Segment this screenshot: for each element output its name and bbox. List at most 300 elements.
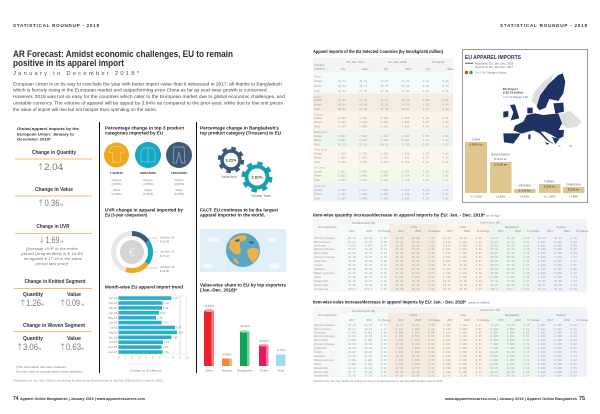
bar chart: Jul-18: [110, 326, 117, 330]
icon: trousers: [166, 142, 192, 168]
table headers: % Change: [477, 318, 490, 322]
donut labels: Jan-Dec '18: [160, 236, 175, 240]
bar chart: 8: [173, 356, 175, 360]
table rows: Woven total: [314, 370, 328, 374]
table rows: Total: [314, 196, 320, 200]
table rows: Overall total: [314, 287, 328, 291]
title: AR Forecast: Amidst economic challenges, EU to remain: [13, 48, 233, 59]
stat: change in UVR: ↓: [38, 236, 46, 246]
note: UVR explanation: as against € 17.18 in the same: [24, 257, 82, 261]
divider: middle column: [196, 122, 197, 373]
map bars: +/- 1.90%: [544, 194, 556, 198]
table rows: Babies' garments: [314, 271, 335, 275]
table rows: Women's blouses: [314, 247, 335, 251]
intro paragraph: the value of import will rise but not hamper Euro spending on the same.: [13, 107, 157, 112]
map bars: +4.25%: [520, 194, 530, 198]
map bars: [465, 138, 584, 198]
table rows: 6.223 6.410 3.00 5.500 5.220 5.09 2.114 2.020 4.45 4.620 4.300 6.93 1.101 1.420 8.97: [348, 332, 577, 334]
map callout: EU import total: EU Import: [503, 87, 518, 91]
table headers: Value: [405, 67, 412, 71]
table headers: 2018: [515, 229, 521, 233]
table headers: % Change: [428, 318, 441, 322]
note: UVR explanation: period (unspecified) is € 16.89: [21, 252, 83, 256]
bar: China: [204, 304, 214, 372]
table headers: China: [410, 313, 418, 317]
table rows: 1.822 1.940 1.895 2.014 4.01 3.81: [338, 174, 449, 178]
panel: month-wise trend: [105, 284, 189, 372]
table headers: 2017: [447, 318, 453, 322]
bar: Turkey: [259, 339, 269, 372]
bar: India: [276, 348, 286, 372]
table headers: Item description: [318, 313, 337, 317]
table rows: Knitted: [314, 134, 323, 138]
table bands: [313, 307, 587, 377]
map bars: $ 13.51 bn: [494, 157, 507, 161]
bar: Turkey: Turkey: [260, 368, 269, 372]
table rows: Women's trousers: [314, 323, 335, 327]
bar: Bangladesh: 18.14%: [240, 324, 250, 328]
icon: volume gear: [244, 164, 270, 190]
stat: change in UVR: [15, 224, 92, 246]
map bars: CAMBODIA: [566, 182, 581, 186]
bar chart: 10: [186, 356, 189, 360]
table rows: World: [314, 74, 321, 78]
bar chart: 0: [118, 356, 120, 360]
chart unit note: (Value in $ billion): [130, 368, 161, 372]
bar: Turkey: 11.52%: [259, 339, 269, 343]
donut chart: €: [129, 246, 136, 260]
table headers: % Change: [527, 318, 540, 322]
note: UVR explanation: [Average UVR of the entire: [26, 247, 78, 251]
category figures: Value: [175, 188, 183, 192]
table rows: Knitted: [314, 98, 323, 102]
category figures: (1.65%): [143, 192, 153, 196]
table headers: % Change: [576, 318, 589, 322]
table rows: Sri Lanka: [314, 166, 326, 170]
table headers: Jan.-Dec. 2018: [388, 60, 407, 64]
table headers: China: [410, 225, 418, 229]
map bars: +/- 2.56%: [470, 194, 482, 198]
stat: woven segment: [14, 323, 92, 353]
table: quantity increase and decrease: [313, 212, 589, 292]
table rows: Sweaters: [314, 267, 326, 271]
panel: top 3 product categories: [104, 126, 192, 196]
stat: knitted segment: Value: [67, 292, 81, 298]
footer: left page: Apparel Online Bangladesh | January 2019 | www.apparelresources.com: [20, 397, 146, 401]
table headers: Vietnam: [556, 313, 567, 317]
bar chart: 6.49: [164, 301, 169, 305]
table rows: Woven: [314, 156, 323, 160]
footer: left page: 74: [13, 396, 19, 402]
map bars: +4.98%: [569, 194, 579, 198]
table headers: [318, 308, 589, 322]
subtitle: January to December 2018*: [13, 71, 140, 77]
table rows: Women's dresses: [314, 255, 335, 259]
table rows: Total: [314, 142, 320, 146]
stat: woven segment: Value: [67, 336, 81, 342]
table rows: 82.10 83.14 1.26 40.12 40.70 1.45 21.05 21.90 4.04 72.40 73.90 2.07 31.02 31.90 2.84: [348, 280, 577, 283]
table rows: 16.04 14.40 15.62 14.33 2.62 0.49: [338, 104, 449, 106]
stat: change in quantity: ↑: [37, 163, 45, 173]
bar chart: Apr-18: [109, 311, 117, 315]
stat: change in value: %: [60, 203, 63, 207]
table rows: 3.021 3.142 3.180 3.301 5.26 5.06: [338, 121, 449, 124]
gear captions: Value item: [221, 175, 237, 179]
table rows: Woven: [314, 192, 323, 196]
bar chart: 9: [179, 356, 181, 360]
intro paragraph: European Union is on its way to conclude the year with better import value than it witnessed in 2017, all thanks to Bangladesh: [13, 82, 283, 86]
table rows: Overcoats: [314, 330, 327, 334]
header: right page: STATISTICAL ROUNDUP - 2018: [500, 23, 587, 28]
table rows: Socks: [314, 362, 322, 366]
bar: Bangladesh: Bangladesh: [237, 368, 253, 372]
table rows: Overall total: [314, 374, 328, 378]
table rows: 42.55 44.20 3.88 28.10 28.55 1.60 9.022 9.350 3.64 45.33 46.40 2.36 6.440 6.210 3.57: [348, 260, 577, 263]
map bars: $ 4.25 bn: [519, 188, 531, 192]
gear captions: [221, 175, 271, 198]
map bars: $ 3.56 bn: [568, 188, 580, 192]
table headers: India: [460, 225, 466, 229]
panel: UVR change donut: [105, 208, 183, 273]
table headers: 2017: [547, 318, 553, 322]
footer: right page: 75: [579, 396, 585, 402]
table rows: 18.50 19.01 2.76 10.10 10.80 6.93 4.201 4.010 4.55 7.200 7.900 9.72 1.100 1.230 3.82: [348, 343, 577, 346]
heading: top product category (Trousers) to EU: [200, 130, 281, 136]
table headers: 2018: [366, 318, 372, 322]
table headers: 2018: [415, 318, 421, 322]
table headers: Qty: [426, 67, 431, 71]
table headers: Item description: [318, 225, 337, 229]
stat: change in UVR: %: [60, 240, 63, 244]
table headers: 2017: [498, 229, 504, 233]
map callout: EU import total: Y-o-Y % Change: 0.36: [503, 96, 528, 99]
table headers: Bangladesh: [505, 313, 520, 317]
map legend: Imports by EU, Jan.-Dec. 2018: [475, 62, 514, 66]
table rows: 15.62 15.04 3.71 22.10 21.55 2.49 6.001 6.210 3.48 18.40 19.20 4.35 5.220 5.500 5.36: [348, 248, 577, 251]
table rows: Knitted: [314, 116, 323, 120]
table bands: [313, 58, 453, 202]
table: value increase and decrease: (value in million): [468, 300, 490, 304]
table rows: Total: [314, 89, 320, 93]
category figures: Volume: [112, 178, 122, 182]
table headers: 2018: [464, 318, 470, 322]
bar chart: Mar-18: [108, 306, 118, 310]
table rows: 12.62 12.04 4.60 9.100 8.550 6.04 3.001 3.210 6.96 8.400 9.200 9.52 1.220 1.500 8.20: [348, 335, 577, 338]
icon: t-shirts: [104, 142, 129, 168]
table rows: 21.40 21.91 2.38 10.40 10.10 2.88 3.040 3.120 2.63 9.500 9.200 3.16 2.140 2.310 7.94: [348, 355, 577, 358]
bar chart: 3: [138, 356, 140, 360]
table headers: 2017: [547, 229, 553, 233]
table rows: Men's shirts: [314, 338, 328, 342]
note: conversion: from the various product-wise import analysis ]: [16, 370, 83, 374]
table headers: 2017: [349, 229, 355, 233]
heading: (Jan.-Dec. 2018)*: [200, 288, 237, 294]
bar chart: Dec-18: [108, 350, 117, 354]
map callout: EU import total: $ 82.70 billion: [503, 90, 523, 94]
bar chart: 5.49: [157, 316, 163, 320]
stat: change in UVR: 1.69: [46, 235, 60, 245]
table headers: 2018: [564, 318, 570, 322]
intro paragraph: However, 2018 was not so easy for the countries which cater to the European market due to global economic challenges, and: [13, 94, 286, 99]
note: conversion: [16, 365, 83, 374]
table headers: Value: [447, 67, 454, 71]
heading: [200, 126, 281, 136]
table rows: 2.511 2.614 2.603 2.705 3.66 3.48: [338, 170, 449, 174]
table rows: 35.77 36.00 0.63 11.21 11.90 6.15 4.620 5.000 8.23 10.21 10.30 0.88 1.130 1.900 8.14: [348, 371, 577, 374]
table rows: Sweaters: [314, 354, 326, 358]
bar chart: Aug-18: [108, 330, 117, 334]
table rows: 10.13 13.41 10.52 13.90 3.85 3.65: [338, 144, 449, 146]
map legend: [465, 62, 514, 74]
stat: knitted segment: ↑: [59, 299, 67, 309]
stat: knitted segment: ↑: [19, 299, 27, 309]
bar chart: 8.54: [178, 330, 184, 334]
table rows: 11.40 11.71 2.72 9.100 9.020 0.88 2.430 2.560 5.35 5.140 5.220 1.56 1.120 1.200 7.14: [348, 276, 577, 279]
header: left page: STATISTICAL ROUNDUP - 2018: [13, 23, 99, 28]
table rows: Hong Kong: [314, 148, 328, 152]
table title: Item-wise value increase/decrease in apparel imports by EU: Jan. - Dec. 2018*: [313, 300, 466, 304]
panel: fact with globe: [200, 208, 286, 272]
bar chart: [108, 296, 189, 360]
table rows: Women's dresses: [314, 342, 335, 346]
table rows: 20.16 20.91 3.72 10.44 10.91 4.50 4.520 4.720 4.42 13.21 14.02 6.13 2.200 2.310 5.00: [348, 324, 577, 327]
bar chart: Nov-18: [108, 345, 117, 349]
map callout: EU import total: [503, 87, 528, 99]
stat: knitted segment: 1.26: [26, 298, 41, 308]
panel intro text: European Union: January to: [17, 132, 75, 136]
stat: change in value: Change in Value: [35, 187, 73, 193]
stat: knitted segment: Quantity: [23, 292, 43, 298]
stat: knitted segment: %: [81, 303, 84, 307]
bar chart: 6.33: [162, 321, 168, 325]
table rows: Knitted total: [314, 366, 328, 370]
table rows: 4.224 5.611 4.402 5.905 4.21 5.24: [338, 139, 449, 142]
table rows: 2.215 2.702 2.310 2.815 4.29 4.18: [338, 152, 449, 156]
table rows: Knitted total: [314, 279, 328, 283]
table headers: Overall imports (M): [352, 221, 375, 225]
bar chart: 6.39: [163, 306, 169, 310]
stat: change in value: 0.36: [44, 198, 60, 208]
heading: UVR change in apparel imported by: [105, 208, 183, 214]
stat: woven segment: %: [81, 347, 84, 351]
table rows: 5.128 4.451 5.330 4.615 3.94 3.68: [338, 117, 449, 120]
table headers: Imports from (M): [480, 308, 500, 312]
icon: value gear: 3.21%: [225, 158, 237, 162]
table headers: 2017: [398, 229, 404, 233]
table rows: 40.18 41.02 1.26 13.12 13.70 4.42 8.050 8.900 0.56 23.40 23.90 2.14 5.020 5.900 7.53: [348, 367, 577, 370]
bar: Vietnam: 4.89%: [223, 352, 232, 356]
table title: Item-wise quantity increase/decrease in apparel imports by EU: Jan. - Dec. 2018*: [313, 212, 485, 218]
table rows: 10.22 10.45 2.25 15.11 15.30 1.26 6.120 6.010 1.80 12.03 12.50 3.91 9.014 9.220 2.29: [348, 241, 577, 244]
note: UVR explanation: period last year]*: [36, 262, 70, 266]
table rows: T-shirts: [314, 263, 323, 267]
table rows: 12.55 12.20 2.79 7.100 7.550 6.34 2.022 2.350 6.22 7.330 7.400 0.95 1.440 1.210 5.97: [348, 347, 577, 350]
table rows: 81.23 75.95 82.80 77.02 2.04 0.36: [338, 90, 449, 93]
category figures: Value: [113, 188, 120, 192]
table rows: [314, 236, 577, 291]
category figures: (3.07%): [174, 182, 184, 186]
heading: apparel importer in the world.: [200, 212, 265, 218]
heading: Percentage change in Bangladesh's: [200, 126, 279, 132]
stat: change in value: ↑: [37, 199, 45, 209]
donut labels: € 16.89: [160, 240, 169, 244]
table headers: [318, 220, 589, 233]
table rows: [314, 74, 449, 200]
table headers: 2017: [349, 318, 355, 322]
donut labels: € 16.80: [160, 269, 169, 273]
heading: FACT: EU continues to be the largest: [200, 208, 278, 214]
stat: woven segment: Change in Woven Segment: [23, 323, 85, 329]
panel: top exporters bar chart: [200, 282, 286, 372]
category figures: Volume: [143, 178, 153, 182]
map bars: TURKEY: [544, 180, 555, 184]
category figures: (4.75%): [111, 192, 122, 196]
table headers: 2018: [464, 229, 470, 233]
bar chart: 6.33: [162, 345, 168, 349]
heading: Month-wise EU apparel import trend: [105, 284, 183, 290]
intro paragraph: unstable currency. The volume of apparel will be upped by 3.84% as compared to the prior-year, while due to low unit prices: [13, 100, 283, 106]
table headers: 2017: [398, 318, 404, 322]
table rows: 4.119 4.525 4.170 4.716 1.24 4.22: [338, 161, 449, 164]
table headers: Bangladesh: [505, 225, 520, 229]
bar chart: Jan-18: [109, 296, 118, 300]
heading: Value-wise share to EU by top exporters: [200, 282, 286, 288]
table rows: 4.223 4.410 4.43 18.50 18.22 1.51 5.114 5.020 1.84 14.62 14.30 2.19 8.101 8.420 3.94: [348, 244, 577, 248]
table rows: 5.912 7.801 6.122 8.004 3.55 2.60: [338, 135, 449, 138]
bar chart: 5.91: [160, 311, 166, 315]
bar: Vietnam: Vietnam: [222, 368, 233, 372]
table headers: Vietnam: [556, 225, 567, 229]
bar chart: May-18: [108, 316, 117, 320]
table rows: 158.0 161.3 2.04 85.33 86.60 1.49 35.67 36.90 3.45 120.6 124.2 2.98 51.15 52.80 3.23: [348, 288, 577, 291]
icon: value gear: ↑: [230, 152, 232, 158]
map bars: $ 28.03 bn: [470, 142, 483, 146]
footnote: right page: *Selections are Jan.-Sep. 2018 in all holdings for data as per Eurostat data for Jan-Sep 2018 and Euro rates for 2018.: [313, 379, 443, 383]
heading: categories imported by EU: [105, 130, 164, 136]
table: value increase and decrease: [313, 300, 589, 378]
table rows: 8.149 7.593 8.510 7.916 4.43 4.25: [338, 126, 449, 128]
table headers: % Change: [576, 229, 589, 233]
table rows: T-shirts: [314, 350, 323, 354]
table headers: India: [460, 313, 466, 317]
map: Europe: [503, 73, 582, 146]
stat: knitted segment: [14, 279, 92, 309]
table rows: Men's trousers: [314, 327, 332, 331]
icon: volume gear: 2.81%: [251, 174, 263, 180]
stat: knitted segment: Change in Knitted Segment: [24, 279, 86, 285]
table rows: Total: [314, 178, 320, 182]
table rows: Woven: [314, 102, 323, 106]
map legend: Y-o-Y % Change in Value: [475, 70, 507, 74]
table headers: Imports from (M): [480, 220, 500, 224]
table headers: Value: [362, 67, 369, 71]
table: imports by selected countries: [313, 49, 454, 202]
panel: Bangladesh trousers gears: [200, 126, 281, 198]
table headers: Overall imports (M): [352, 309, 375, 313]
bar: India: 6.76%: [277, 348, 286, 352]
table rows: Socks: [314, 275, 322, 279]
table rows: Knitted: [314, 152, 323, 156]
table rows: [314, 323, 577, 378]
table: quantity increase and decrease: (in mn kg): [486, 214, 499, 218]
donut labels: € 17.18: [160, 254, 169, 258]
category figures: TROUSERS: [171, 171, 187, 175]
table rows: 4.333 4.554 4.498 4.719 3.81 3.62: [338, 179, 449, 182]
table rows: 3.400 3.710 9.12 1.100 1.020 7.27 0.430 0.560 3.02 0.140 0.220 7.14 0.120 0.200 6.67: [348, 363, 577, 366]
table rows: Vietnam: [314, 112, 323, 116]
table headers: % Change: [428, 229, 441, 233]
stat: woven segment: 3.06: [23, 342, 38, 352]
icon: volume gear: ↓: [256, 179, 258, 184]
stat: woven segment: ↑: [16, 343, 24, 353]
table rows: 28.39 24.62 27.49 24.97 3.17 1.42: [338, 108, 449, 111]
bar chart: 7.85: [172, 335, 178, 339]
table rows: 8.330 8.400 0.84 3.200 3.600 2.50 1.120 1.330 8.75 2.200 2.900 3.18 0.510 0.540 5.88: [348, 359, 577, 362]
table headers: % Change: [432, 60, 445, 64]
title: positive in its apparel import: [13, 57, 124, 68]
table rows: Cambodia: [314, 184, 326, 188]
table headers: Qty: [341, 67, 346, 71]
table rows: Woven: [314, 120, 323, 124]
category figures: Volume: [174, 178, 184, 182]
table rows: 14.09 14.72 4.47 21.06 22.01 4.51 7.120 7.400 3.93 18.51 19.10 3.19 4.220 4.100 2.84: [348, 252, 577, 255]
table rows: China: [314, 95, 321, 99]
category figures: [110, 171, 187, 196]
map bars: +2.90%: [496, 194, 506, 198]
bar: China: China: [205, 368, 213, 372]
stat: woven segment: %: [38, 347, 41, 351]
footnote: left page: *Selections are Jan.-Sep. 2018 in all holdings for data as per Eurostat data for Jan-Sep 2018 and Euro rates for 2018.: [13, 378, 163, 382]
table rows: 18.50 19.01 2.76 25.10 25.80 2.79 8.201 8.010 2.32 30.20 30.90 2.32 7.100 7.230 1.83: [348, 256, 577, 259]
bar chart: 6: [159, 356, 161, 360]
bar: Vietnam: [222, 352, 233, 372]
table rows: Women's trousers: [314, 236, 335, 240]
table rows: Men's trousers: [314, 240, 332, 244]
donut labels: [146, 236, 175, 273]
table rows: 75.95 77.02 0.36 24.33 25.60 5.22 12.67 13.90 9.71 33.61 34.20 1.76 6.150 7.800 6.83: [348, 374, 577, 378]
table headers: % Change: [477, 229, 490, 233]
footer: right page: www.apparelresources.com | January 2019 | Apparel Online Bangladesh: [444, 397, 578, 401]
table rows: Knitted: [314, 188, 323, 192]
bar chart: 4: [145, 356, 147, 360]
bar chart: 1: [125, 356, 127, 360]
panel intro text: Global apparel imports by the: [17, 127, 79, 131]
bar chart: 2: [132, 356, 134, 360]
footer: right page: [444, 396, 585, 402]
map bars: $ 9.82 bn: [544, 184, 556, 188]
table rows: 25.16 26.01 3.38 12.44 12.91 3.78 14.52 15.20 4.68 43.21 45.02 4.19 21.20 22.11 4.29: [348, 237, 577, 240]
bar chart: Jun-18: [109, 321, 118, 325]
divider: left column: [99, 122, 100, 373]
table rows: 10.42 10.75 3.17 8.110 8.300 2.34 3.120 3.010 3.53 9.030 9.500 5.20 1.014 1.220 9.31: [348, 328, 577, 331]
gear captions: Volume Tools: [251, 194, 271, 198]
table headers: Jan.-Dec. 2017: [346, 60, 365, 64]
table rows: Babies' garments: [314, 358, 335, 362]
bar chart: 8.24: [176, 326, 182, 330]
heading: [105, 208, 183, 218]
table rows: Knitted: [314, 170, 323, 174]
donut labels: Jan-Dec '17: [160, 250, 175, 254]
map bars: CHINA: [472, 138, 480, 142]
table rows: 3.235 3.391 3.407 3.560 5.32 4.98: [338, 198, 449, 200]
title: [13, 48, 233, 68]
category figures: SWEATERS: [140, 171, 156, 175]
bar chart: 7: [166, 356, 168, 360]
heading: [200, 282, 286, 294]
table rows: 29.40 29.91 1.73 24.40 24.10 1.23 6.040 6.120 1.32 61.50 62.20 1.14 9.140 9.310 1.86: [348, 268, 577, 271]
table rows: 1.904 1.823 1.860 1.901 2.31 4.28: [338, 156, 449, 160]
table headers: 2017: [498, 318, 504, 322]
